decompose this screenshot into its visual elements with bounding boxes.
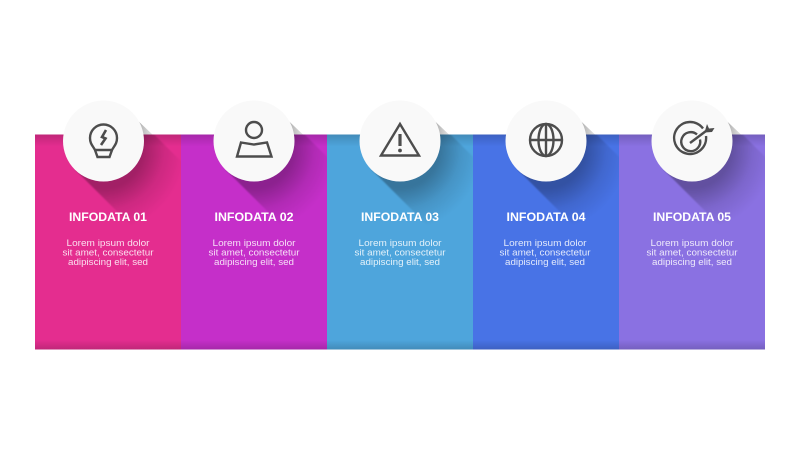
icon: globe [530,124,562,156]
panel: infodata 03 [327,122,473,350]
infographic [35,120,765,350]
body text 05: Lorem ipsum dolor [650,238,734,249]
icon: target with arrow [674,122,714,154]
circle badge 03 [360,100,440,182]
body text 01: Lorem ipsum dolor [66,238,150,249]
panel: infodata 05 [619,122,765,350]
panel: infodata 01 [35,122,181,350]
body text 02: adipiscing elit, sed [214,257,294,268]
body text 04 [500,238,591,268]
icon: light bulb [90,124,117,157]
heading 02: INFODATA 02 [214,210,294,224]
panel: infodata 04 [473,122,619,350]
heading 05: INFODATA 05 [653,210,731,224]
body text 01: sit amet, consectetur [62,248,154,258]
circle badge 02 [214,100,294,182]
body text 01: adipiscing elit, sed [68,257,148,268]
body text 02: Lorem ipsum dolor [212,238,296,249]
icon: person on map [237,122,272,156]
body text 03: adipiscing elit, sed [360,257,440,268]
circle badge 05 [652,100,732,182]
body text 05: sit amet, consectetur [646,248,738,258]
body text 03: Lorem ipsum dolor [358,238,442,249]
body text 03: sit amet, consectetur [354,248,446,258]
body text 02: sit amet, consectetur [208,248,300,258]
icon: warning triangle [381,124,419,156]
circle badge 01 [63,100,144,182]
heading 01: INFODATA 01 [69,210,147,224]
heading 03: INFODATA 03 [361,210,439,224]
body text 04: Lorem ipsum dolor [504,238,587,249]
body text 02 [208,238,300,268]
panel: infodata 02 [181,122,327,350]
circle badge 04 [506,100,586,182]
body text 04: adipiscing elit, sed [505,257,585,268]
heading 04: INFODATA 04 [506,210,586,224]
body text 05 [646,238,738,268]
body text 03 [354,238,446,268]
body text 05: adipiscing elit, sed [652,257,732,268]
body text 01 [62,238,154,268]
body text 04: sit amet, consectetur [500,248,591,258]
